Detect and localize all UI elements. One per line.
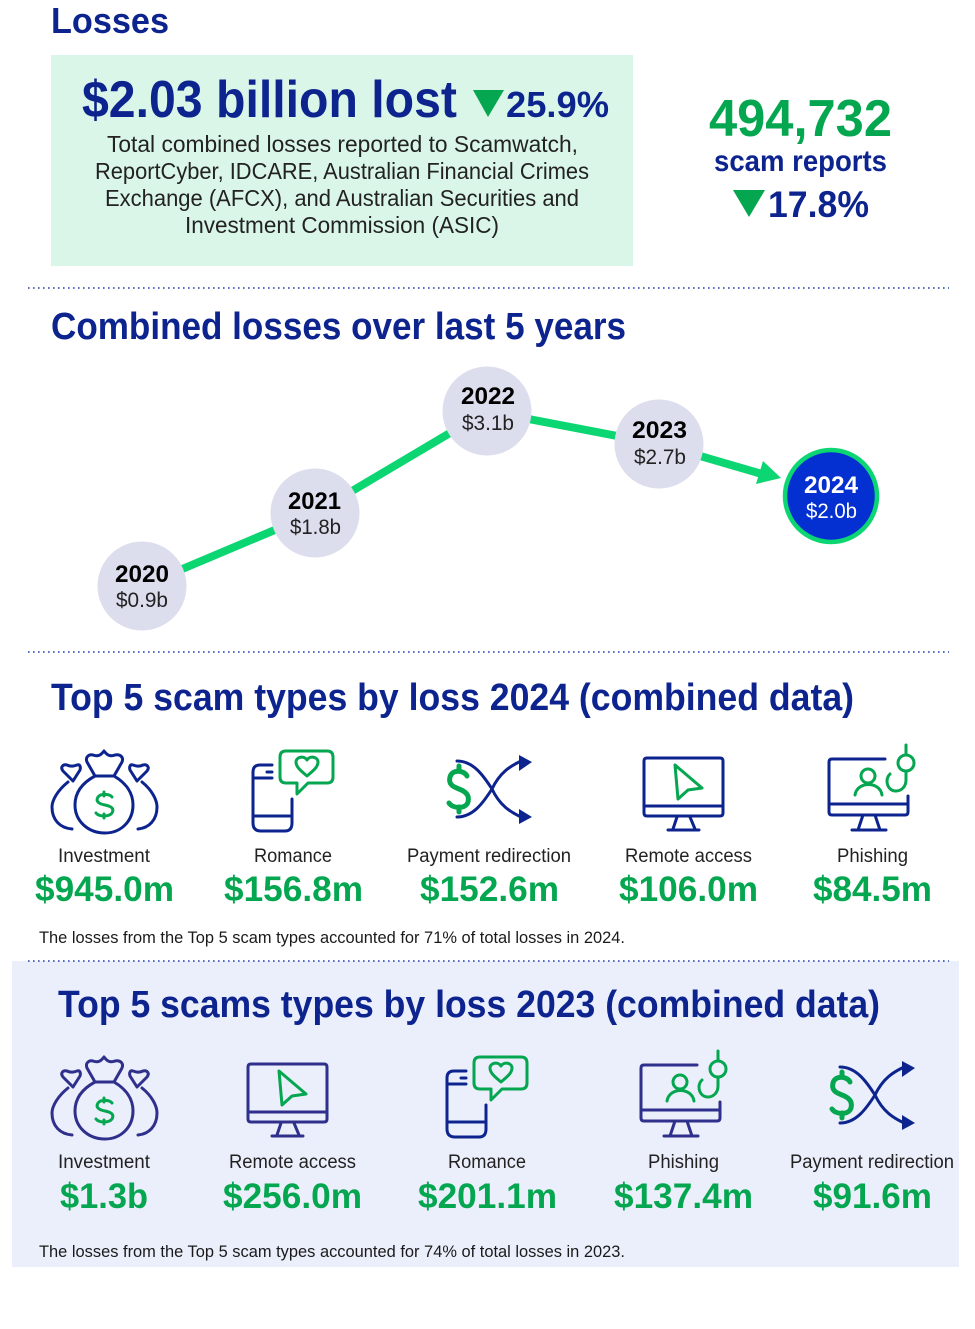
scam type 2024: phishing bbox=[813, 745, 932, 909]
icon: money bags bbox=[52, 751, 157, 833]
scam type 2023: romance bbox=[418, 1057, 557, 1216]
scam type 2024: investment: Investment bbox=[58, 846, 151, 867]
scam type 2023: phishing bbox=[614, 1051, 753, 1216]
description text bbox=[95, 131, 589, 238]
icon: dollar with crossing arrows bbox=[832, 1061, 915, 1130]
node: 2020 bbox=[98, 542, 186, 630]
scam type 2024: remote access: Remote access bbox=[625, 846, 752, 867]
scam type 2023: remote access: $256.0m bbox=[223, 1177, 362, 1216]
scam type 2024: remote access bbox=[619, 758, 758, 909]
scam type 2024: investment: $945.0m bbox=[35, 870, 174, 909]
stat: scam reports: 494,732 bbox=[709, 90, 892, 148]
line chart: combined losses 2020 to 2024 bbox=[98, 366, 877, 630]
heading: combined losses: Combined losses over last 5 years bbox=[51, 306, 626, 348]
scam type 2023: payment redirection: $91.6m bbox=[813, 1177, 932, 1216]
stat: scam reports bbox=[709, 90, 892, 225]
panel: top 5 2023 bbox=[12, 961, 959, 1267]
icon: phone with heart message bbox=[253, 751, 333, 831]
node: 2022: 2022 bbox=[461, 383, 515, 410]
node: 2022: $3.1b bbox=[462, 412, 514, 435]
icon: phone with heart message bbox=[447, 1057, 527, 1137]
icon: money bags bbox=[52, 1057, 157, 1139]
node: 2020: $0.9b bbox=[116, 589, 168, 612]
scam type 2023: investment bbox=[52, 1057, 157, 1216]
description text: Investment Commission (ASIC) bbox=[185, 212, 499, 238]
node: 2023 bbox=[614, 400, 704, 488]
icon: monitor with cursor bbox=[644, 758, 723, 830]
scam type 2024: payment redirection bbox=[407, 755, 571, 909]
node: 2024: $2.0b bbox=[806, 500, 857, 523]
note 2024: The losses from the Top 5 scam types accounted for 71% of total losses in 2024. bbox=[39, 928, 625, 947]
scam type 2024: phishing: $84.5m bbox=[813, 870, 932, 909]
scam type 2023: investment: Investment bbox=[58, 1152, 151, 1173]
change: 25.9%: 25.9% bbox=[506, 84, 609, 125]
node: 2023: $2.7b bbox=[634, 446, 686, 469]
scam type 2024: payment redirection: Payment redirection bbox=[407, 846, 571, 867]
scam type 2024: phishing: Phishing bbox=[837, 846, 908, 867]
scam type 2023: remote access: Remote access bbox=[229, 1152, 356, 1173]
headline figure: $2.03 billion lost: $2.03 billion lost bbox=[82, 71, 457, 129]
scam type 2023: phishing: $137.4m bbox=[614, 1177, 753, 1216]
icon: dollar with crossing arrows bbox=[449, 755, 532, 824]
scam type 2023: phishing: Phishing bbox=[648, 1152, 719, 1173]
stat: scam reports: 17.8% bbox=[768, 184, 869, 225]
heading: Losses: Losses bbox=[51, 0, 169, 41]
scam type 2023: remote access bbox=[223, 1064, 362, 1216]
scam type 2024: romance: $156.8m bbox=[224, 870, 363, 909]
heading: top 5 2024: Top 5 scam types by loss 2024 (combined data) bbox=[51, 677, 854, 719]
description text: Total combined losses reported to Scamwatch, bbox=[107, 131, 578, 157]
scam type 2024: payment redirection: $152.6m bbox=[420, 870, 559, 909]
node: 2024: 2024 bbox=[804, 472, 859, 499]
node: 2024 bbox=[785, 450, 877, 542]
scam type 2024: romance: Romance bbox=[254, 846, 332, 867]
icon: down triangle bbox=[473, 90, 504, 117]
heading: top 5 2023: Top 5 scams types by loss 2023 (combined data) bbox=[58, 984, 880, 1026]
stat: scam reports: scam reports bbox=[714, 145, 887, 178]
icon: monitor with hook bbox=[829, 745, 914, 830]
scam type 2023: payment redirection bbox=[790, 1061, 954, 1216]
scam type 2023: romance: Romance bbox=[448, 1152, 526, 1173]
scam type 2024: remote access: $106.0m bbox=[619, 870, 758, 909]
panel: total losses bbox=[51, 55, 633, 266]
scam type 2023: romance: $201.1m bbox=[418, 1177, 557, 1216]
node: 2021: $1.8b bbox=[290, 516, 341, 539]
note 2023: The losses from the Top 5 scam types accounted for 74% of total losses in 2023. bbox=[39, 1242, 625, 1261]
node: 2023: 2023 bbox=[632, 417, 687, 444]
description text: Exchange (AFCX), and Australian Securities and bbox=[105, 185, 579, 211]
scam type 2023: investment: $1.3b bbox=[60, 1177, 148, 1216]
node: 2021 bbox=[270, 468, 360, 558]
node: 2022 bbox=[442, 366, 532, 456]
scam type 2024: investment bbox=[35, 751, 174, 909]
node: 2021: 2021 bbox=[288, 488, 341, 515]
scam type 2023: payment redirection: Payment redirection bbox=[790, 1152, 954, 1173]
trend line with arrow bbox=[142, 411, 781, 586]
icon: monitor with cursor bbox=[248, 1064, 327, 1136]
node: 2020: 2020 bbox=[115, 561, 169, 588]
icon: monitor with hook bbox=[641, 1051, 726, 1136]
description text: ReportCyber, IDCARE, Australian Financial Crimes bbox=[95, 158, 589, 184]
scam type 2024: romance bbox=[224, 751, 363, 909]
